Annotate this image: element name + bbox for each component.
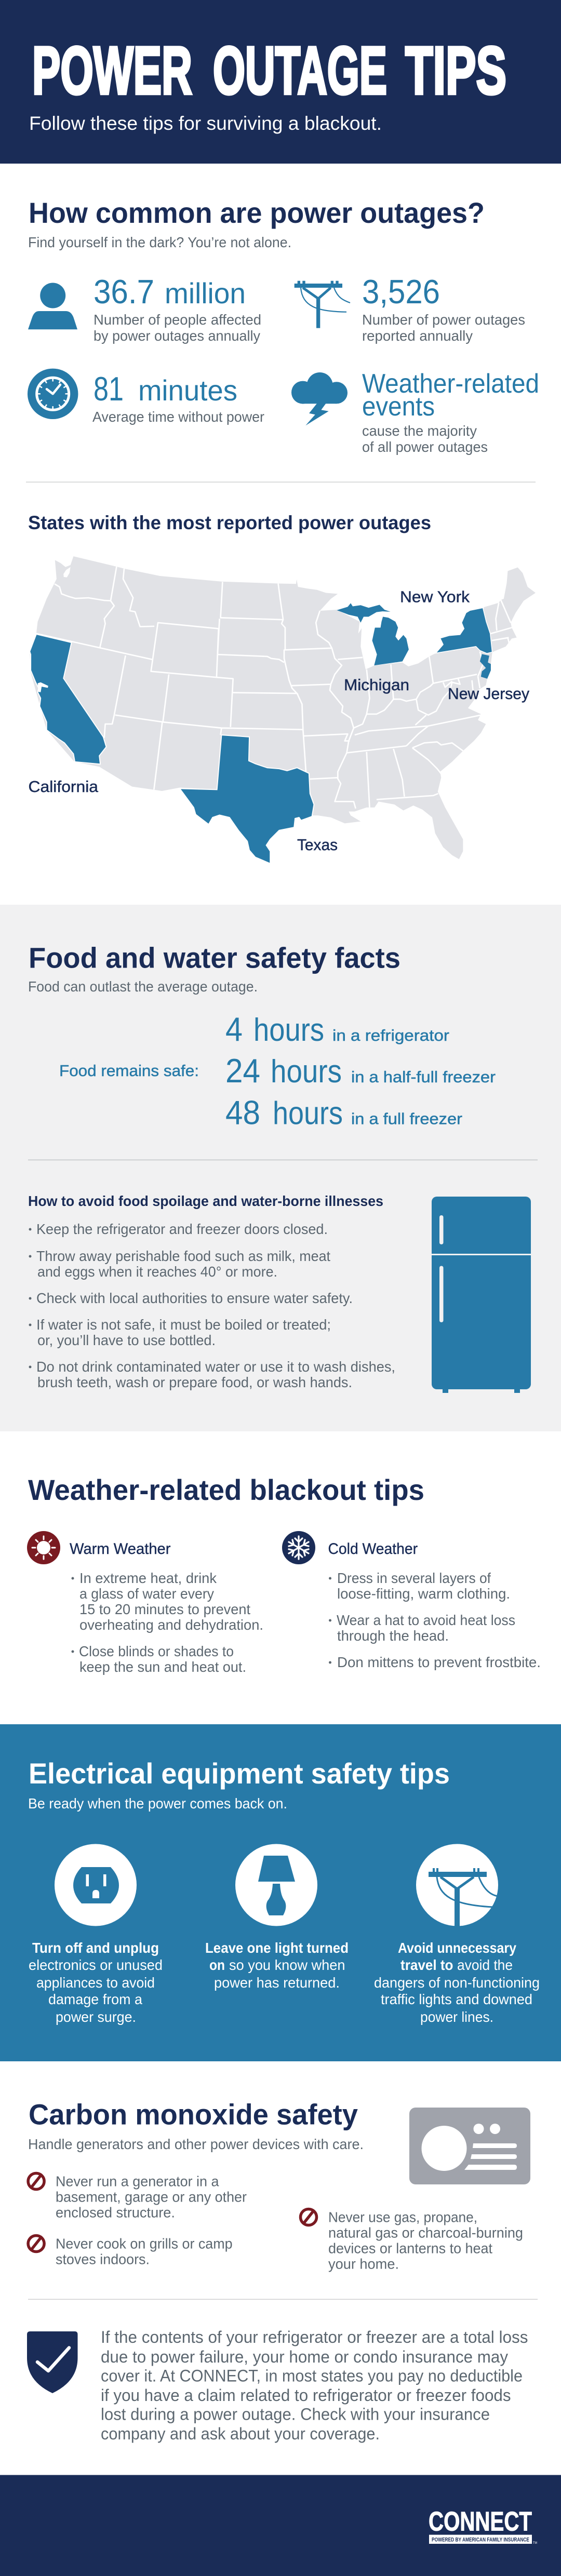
- cold weather heading: Cold Weather: [328, 1540, 418, 1558]
- insurance text: company and ask about your coverage.: [101, 2424, 380, 2443]
- stat: 36.7 million: 36.7: [94, 273, 154, 311]
- bullet list: If water is not safe, it must be boiled or treated;: [36, 1317, 331, 1333]
- bullet list: brush teeth, wash or prepare food, or wash hands.: [37, 1374, 352, 1390]
- stat: 24 hours: hours: [271, 1054, 342, 1090]
- stat: 4 hours: [225, 1010, 449, 1048]
- warning: gas devices: [300, 2209, 523, 2272]
- stat: 24 hours: in a half-full freezer: [351, 1068, 496, 1086]
- warning: gas devices: devices or lanterns to heat: [328, 2240, 492, 2257]
- logo: CONNECT: TM: [533, 2542, 537, 2545]
- stat: 36.7 million: [94, 273, 261, 344]
- bullet list: Do not drink contaminated water or use it to wash dishes,: [36, 1359, 395, 1375]
- insurance text: cover it. At CONNECT, in most states you pay no deductible: [101, 2366, 523, 2385]
- icon: outlet: [55, 1844, 137, 1926]
- stat: 48 hours: in a full freezer: [351, 1109, 462, 1128]
- tip: unplug: damage from a: [48, 1991, 142, 2007]
- cold weather tips: [329, 1570, 541, 1670]
- subheading: How to avoid food spoilage and water-borne illnesses: [28, 1193, 383, 1209]
- bullet list: [29, 1221, 395, 1390]
- map labels: California: [28, 777, 99, 796]
- stat: 81 minutes: 81: [94, 370, 124, 408]
- stat: weather-related events: [362, 369, 539, 455]
- tip: avoid travel: dangers of non-functioning: [374, 1975, 540, 1991]
- stat: 3,526: 3,526: [362, 273, 440, 311]
- title: [32, 32, 506, 108]
- stat: weather-related events: of all power outages: [362, 439, 488, 455]
- icon: lamp: [235, 1844, 317, 1926]
- icon: snowflake: [282, 1531, 315, 1564]
- cold weather tips: loose-fitting, warm clothing.: [337, 1586, 510, 1602]
- intro text: Find yourself in the dark? You’re not alone.: [28, 234, 291, 250]
- warm weather tips: overheating and dehydration.: [79, 1617, 263, 1633]
- icon: shield: [27, 2331, 78, 2393]
- insurance text: if you have a claim related to refrigerator or freezer foods: [101, 2386, 511, 2405]
- warning: grills: Never cook on grills or camp: [56, 2235, 233, 2252]
- warning: gas devices: Never use gas, propane,: [328, 2209, 477, 2225]
- title: OUTAGE: [213, 32, 387, 108]
- logo: CONNECT: POWERED BY AMERICAN FAMILY INSURANCE: [432, 2537, 529, 2543]
- heading: How common are power outages?: [29, 196, 485, 229]
- bullet list: Throw away perishable food such as milk, meat: [36, 1248, 330, 1264]
- map: United States: [30, 556, 536, 864]
- tip: leave a light on: so you know when: [229, 1957, 345, 1973]
- state: New Jersey: [480, 654, 491, 679]
- tip: unplug: appliances to avoid: [36, 1975, 155, 1991]
- tip: avoid travel: Avoid unnecessary: [398, 1940, 516, 1956]
- bullet list: and eggs when it reaches 40° or more.: [37, 1264, 277, 1280]
- title: TIPS: [405, 32, 506, 108]
- logo: CONNECT: [429, 2507, 537, 2545]
- heading: Electrical equipment safety tips: [29, 1757, 450, 1790]
- tip: avoid travel: travel to: [400, 1957, 453, 1973]
- stat: 4 hours: in a refrigerator: [332, 1026, 449, 1044]
- stat: 36.7 million: Number of people affected: [94, 312, 261, 328]
- warning: grills: stoves indoors.: [56, 2251, 150, 2268]
- stat: 24 hours: 24: [225, 1052, 260, 1090]
- stat: 81 minutes: [92, 370, 264, 425]
- icon: refrigerator: [432, 1197, 531, 1393]
- map labels: Michigan: [344, 676, 409, 694]
- tip: avoid travel: avoid the: [457, 1957, 513, 1973]
- insurance text: lost during a power outage. Check with your insurance: [101, 2405, 490, 2423]
- map labels: [28, 588, 529, 854]
- cold weather tips: Dress in several layers of: [337, 1570, 491, 1586]
- title: POWER: [32, 32, 192, 108]
- bullet list: Keep the refrigerator and freezer doors closed.: [36, 1221, 328, 1237]
- stat: 3,526: [362, 273, 525, 344]
- map labels: New York: [400, 588, 470, 606]
- cold weather tips: Wear a hat to avoid heat loss: [337, 1612, 515, 1628]
- tip: unplug: electronics or unused: [29, 1957, 163, 1973]
- insurance text: [101, 2328, 528, 2443]
- warm weather tips: 15 to 20 minutes to prevent: [79, 1601, 250, 1617]
- tip: unplug: Turn off and unplug: [32, 1940, 159, 1956]
- intro text: Be ready when the power comes back on.: [28, 1795, 287, 1812]
- stat: weather-related events: events: [362, 392, 435, 422]
- stat: weather-related events: Weather-related: [362, 369, 539, 399]
- warning: generator: Never run a generator in a: [56, 2173, 219, 2190]
- stat: 48 hours: 48: [225, 1094, 260, 1131]
- tip: avoid travel: [374, 1940, 540, 2025]
- stat: 24 hours: [225, 1052, 496, 1090]
- logo: CONNECT: CONNECT: [429, 2507, 532, 2537]
- icon: clock: [28, 369, 78, 419]
- bullet list: Check with local authorities to ensure water safety.: [36, 1290, 353, 1306]
- warning: generator: basement, garage or any other: [56, 2189, 247, 2205]
- bullet list: or, you’ll have to use bottled.: [37, 1332, 216, 1348]
- icon: power lines: [416, 1844, 498, 1927]
- warning: gas devices: natural gas or charcoal-burning: [328, 2225, 523, 2241]
- warm weather tips: Close blinds or shades to: [79, 1643, 234, 1659]
- stat: 81 minutes: minutes: [138, 374, 237, 407]
- panel: states map: [28, 512, 536, 864]
- heading: Weather-related blackout tips: [28, 1473, 424, 1506]
- stat: 36.7 million: by power outages annually: [94, 328, 260, 344]
- tip: leave a light on: Leave one light turned: [205, 1940, 349, 1956]
- panel: how common are power outages: [28, 196, 539, 455]
- stat: 48 hours: [225, 1094, 462, 1131]
- intro text: Food can outlast the average outage.: [28, 978, 258, 995]
- state: California: [30, 634, 106, 764]
- stat: 81 minutes: Average time without power: [92, 409, 264, 425]
- stat: weather-related events: cause the majority: [362, 423, 477, 439]
- warm weather heading: Warm Weather: [70, 1540, 171, 1558]
- warning: generator: [28, 2173, 247, 2220]
- map heading: States with the most reported power outages: [28, 512, 431, 533]
- stat: 4 hours: hours: [253, 1012, 324, 1048]
- heading: Carbon monoxide safety: [29, 2098, 358, 2130]
- panel: header: [0, 0, 561, 164]
- stat: 4 hours: 4: [225, 1010, 243, 1048]
- state: New York: [436, 608, 492, 653]
- icon: storm cloud: [291, 372, 348, 425]
- warning: grills: [28, 2235, 233, 2268]
- warm weather tips: a glass of water every: [79, 1586, 214, 1602]
- tip: avoid travel: traffic lights and downed: [381, 1991, 532, 2007]
- tip: unplug: power surge.: [56, 2009, 136, 2025]
- stat: 3,526: reported annually: [362, 328, 473, 344]
- stat: 48 hours: hours: [273, 1096, 343, 1131]
- intro text: Handle generators and other power devices with care.: [28, 2136, 364, 2152]
- panel: electrical equipment safety: [0, 1724, 561, 2061]
- tip: leave a light on: power has returned.: [214, 1975, 340, 1991]
- warning: generator: enclosed structure.: [56, 2204, 175, 2220]
- icon: carbon monoxide detector: [409, 2108, 530, 2184]
- subtitle: Follow these tips for surviving a blackout.: [29, 113, 382, 134]
- tip: leave a light on: on: [209, 1957, 225, 1973]
- warm weather tips: In extreme heat, drink: [79, 1570, 217, 1586]
- tip: unplug: [29, 1940, 163, 2025]
- state: Michigan: [337, 603, 409, 665]
- state: Texas: [180, 735, 314, 864]
- insurance text: due to power failure, your home or condo insurance may: [101, 2347, 508, 2366]
- cold weather tips: Don mittens to prevent frostbite.: [337, 1654, 541, 1670]
- icon: sun: [27, 1531, 60, 1564]
- map labels: New Jersey: [448, 685, 529, 703]
- warm weather tips: [72, 1570, 263, 1675]
- stat: 3,526: Number of power outages: [362, 312, 525, 328]
- tip: avoid travel: power lines.: [420, 2009, 493, 2025]
- cold weather tips: through the head.: [337, 1628, 449, 1644]
- tip: leave a light on: [205, 1940, 349, 1991]
- heading: Food and water safety facts: [29, 941, 400, 974]
- map labels: Texas: [297, 836, 338, 854]
- insurance text: If the contents of your refrigerator or freezer are a total loss: [101, 2328, 528, 2346]
- icon: person: [28, 283, 77, 329]
- panel: carbon monoxide safety: [28, 2098, 530, 2272]
- stat: 36.7 million: million: [165, 277, 246, 310]
- panel: footer: [0, 2475, 561, 2576]
- panel: weather-related blackout tips: [27, 1473, 541, 1675]
- panel: food and water safety: [0, 905, 561, 1431]
- food remains safe label: Food remains safe:: [59, 1062, 199, 1080]
- warm weather tips: keep the sun and heat out.: [79, 1659, 246, 1675]
- warning: gas devices: your home.: [328, 2256, 399, 2272]
- panel: insurance callout: [27, 2328, 528, 2443]
- icon: power pole: [295, 281, 350, 328]
